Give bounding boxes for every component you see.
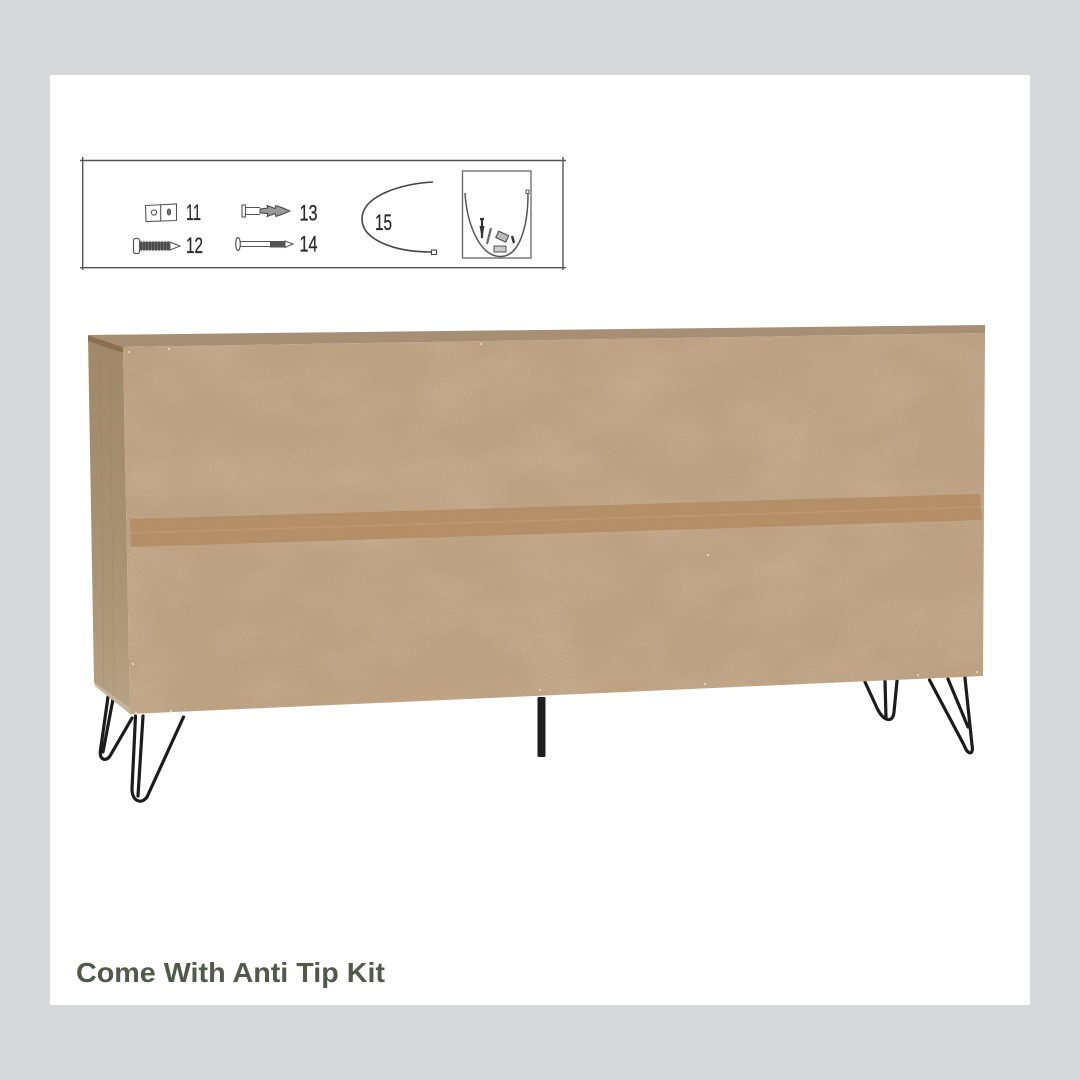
part 12: screw: [134, 233, 203, 258]
tape band: [130, 494, 982, 547]
hairpin legs: far right: [930, 678, 972, 753]
hairpin legs: right: [865, 681, 897, 720]
part 11: bracket: [146, 200, 201, 225]
caption: Come With Anti Tip Kit: [76, 957, 385, 988]
diagram frame: [80, 157, 566, 270]
part 13: anchor bolt: 13: [300, 200, 318, 226]
part 13: anchor bolt: [242, 200, 318, 226]
cabinet top surface: [88, 325, 985, 347]
screw dots: [128, 343, 978, 714]
part 14: long screw: [236, 232, 318, 256]
part 14: long screw: 14: [300, 232, 318, 256]
anti tip kit parts diagram: [80, 157, 566, 270]
cabinet top front edge: [88, 335, 123, 353]
sideboard back view: [88, 325, 990, 801]
part 11: bracket: 11: [186, 200, 201, 225]
cabinet side panel: [88, 336, 130, 714]
kit packaging bag: [462, 171, 531, 258]
center leg: [538, 697, 546, 757]
part 15: cable tie: 15: [375, 210, 392, 235]
white panel: [50, 75, 1030, 1005]
hairpin legs: front left: [132, 716, 184, 801]
part 15: cable tie: [362, 182, 436, 254]
hairpin legs: rear left: [100, 697, 132, 759]
part 12: screw: 12: [186, 233, 203, 258]
back panel: [120, 330, 990, 720]
